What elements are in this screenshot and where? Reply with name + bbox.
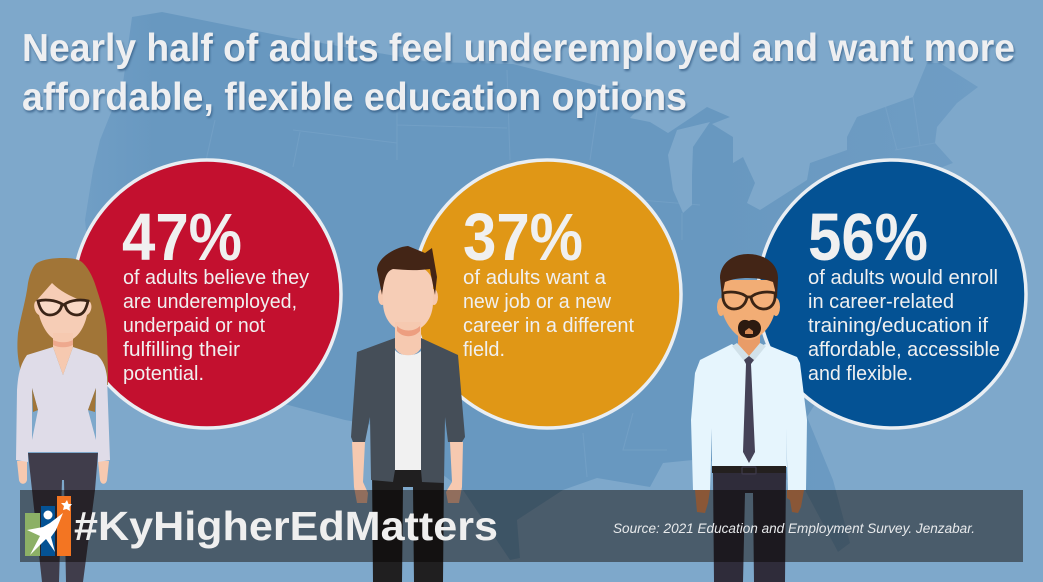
text: 47% description: are underemployed, [123, 291, 297, 313]
text: 56% description: and flexible. [808, 363, 913, 385]
hashtag: #KyHigherEdMatters [74, 503, 498, 549]
text: 56% description: training/education if [808, 315, 988, 337]
panel: blue circle 56% [758, 160, 1026, 428]
source note: Source: 2021 Education and Employment Survey. Jenzabar. [613, 521, 975, 536]
text: 37% description: new job or a new [463, 291, 612, 313]
text: 47% description: potential. [123, 363, 204, 385]
title [22, 27, 1015, 119]
bottom banner bar [20, 490, 1023, 562]
title: Nearly half of adults feel underemployed and want more [22, 27, 1015, 70]
text: 47% description: of adults believe they [123, 267, 309, 289]
text: 56% description [808, 267, 1000, 385]
figure: man with tie and beard [691, 254, 807, 582]
text: 56% description: in career-related [808, 291, 954, 313]
text: 37% description: of adults want a [463, 267, 607, 289]
text: 37% description: field. [463, 339, 505, 361]
stat: 56%: 56% [808, 200, 928, 275]
stat: 47%: 47% [122, 200, 242, 275]
figure: man with dark jacket [351, 246, 465, 582]
text: 47% description: fulfilling their [123, 339, 240, 361]
text: 56% description: of adults would enroll [808, 267, 998, 289]
panel: red circle 47% [73, 160, 341, 428]
text: 47% description: underpaid or not [123, 315, 265, 337]
text: 37% description [463, 267, 634, 361]
text: 47% description [123, 267, 309, 385]
figure: woman with glasses [16, 258, 110, 582]
stat: 37%: 37% [463, 200, 583, 275]
panel: orange circle 37% [413, 160, 681, 428]
text: 56% description: affordable, accessible [808, 339, 1000, 361]
text: 37% description: career in a different [463, 315, 634, 337]
logo: Kentucky higher ed [25, 496, 72, 556]
title: affordable, flexible education options [22, 76, 687, 119]
